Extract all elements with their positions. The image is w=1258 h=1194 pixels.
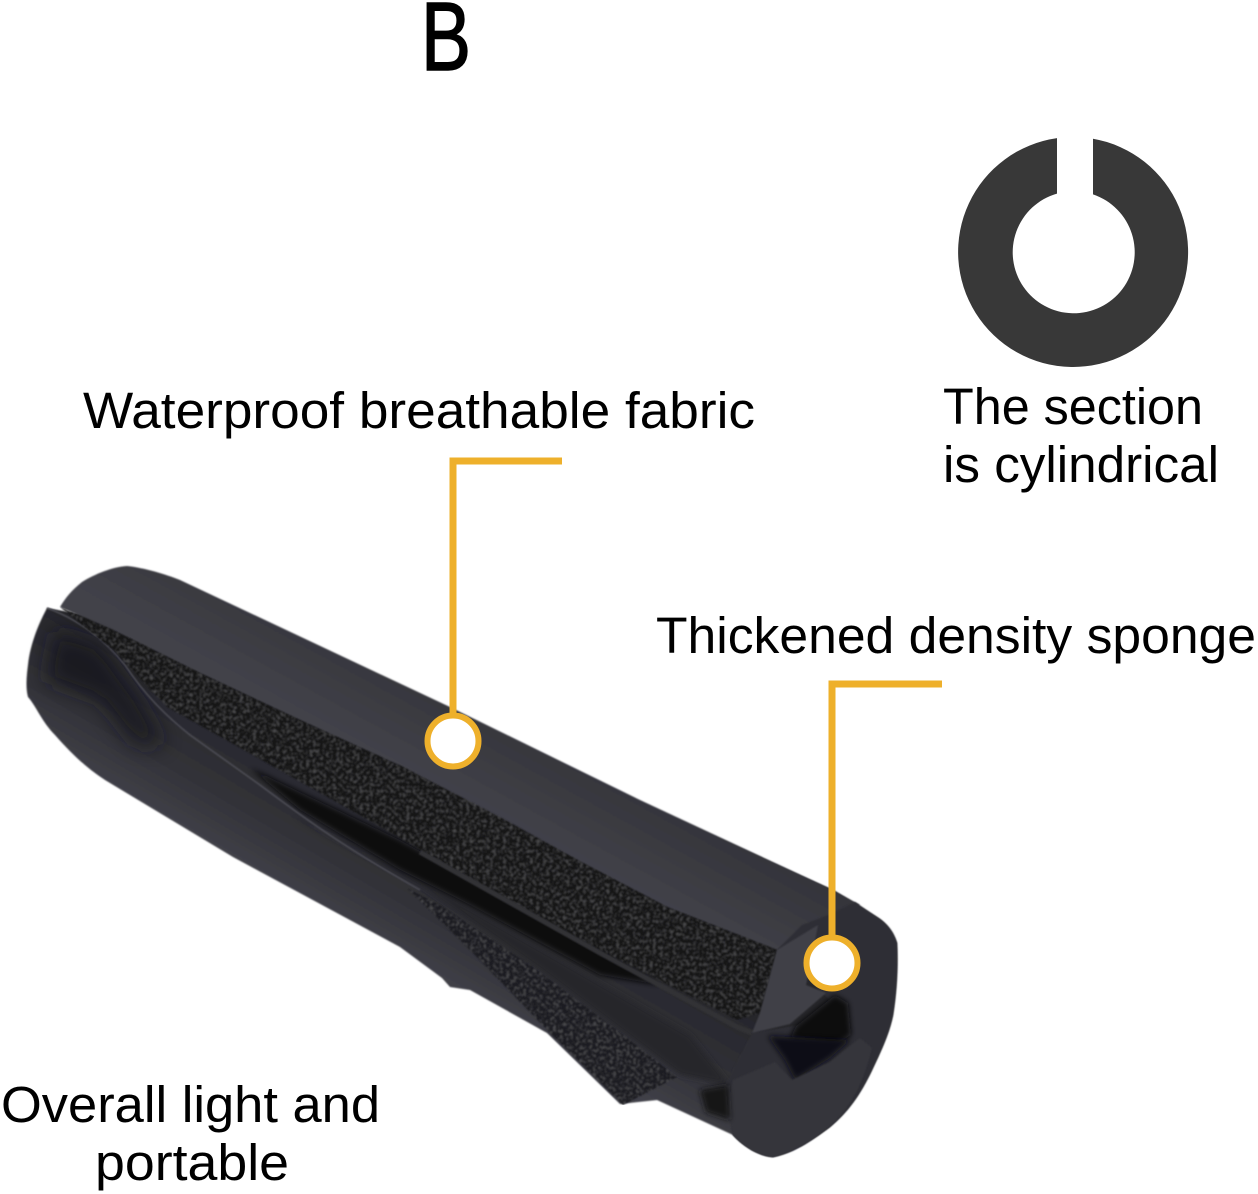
end wrap panel	[729, 1038, 872, 1157]
pad open end	[725, 902, 897, 1157]
velcro strip on flap	[60, 607, 777, 1020]
inner fold	[752, 925, 826, 1033]
text: section label: is cylindrical	[943, 436, 1219, 493]
text: portability label	[1, 1076, 380, 1191]
flap edge	[420, 852, 752, 1033]
icon: cylindrical cross-section ring	[958, 138, 1188, 367]
text: portability label: Overall light and	[1, 1076, 380, 1133]
shadow folds on the left	[45, 630, 165, 745]
product: barbell pad	[26, 566, 897, 1157]
text: portability label: portable	[95, 1134, 289, 1191]
pad upper fabric	[60, 566, 860, 950]
foam opening	[790, 995, 851, 1045]
pad lower body	[26, 608, 897, 1157]
callout: fabric pointer	[428, 461, 562, 766]
dark gap under flap	[250, 768, 660, 985]
lower inner stripes	[768, 1036, 850, 1080]
flap seam	[47, 608, 420, 890]
callout: sponge pointer	[806, 684, 942, 988]
lower end shading	[700, 1085, 730, 1120]
body between seam and strap	[290, 815, 730, 1085]
text: section label	[943, 378, 1219, 493]
text: section label: The section	[943, 378, 1203, 435]
strap	[407, 888, 677, 1105]
text: fabric label: Waterproof breathable fabric	[83, 382, 755, 439]
text: sponge label: Thickened density sponge	[656, 607, 1256, 664]
